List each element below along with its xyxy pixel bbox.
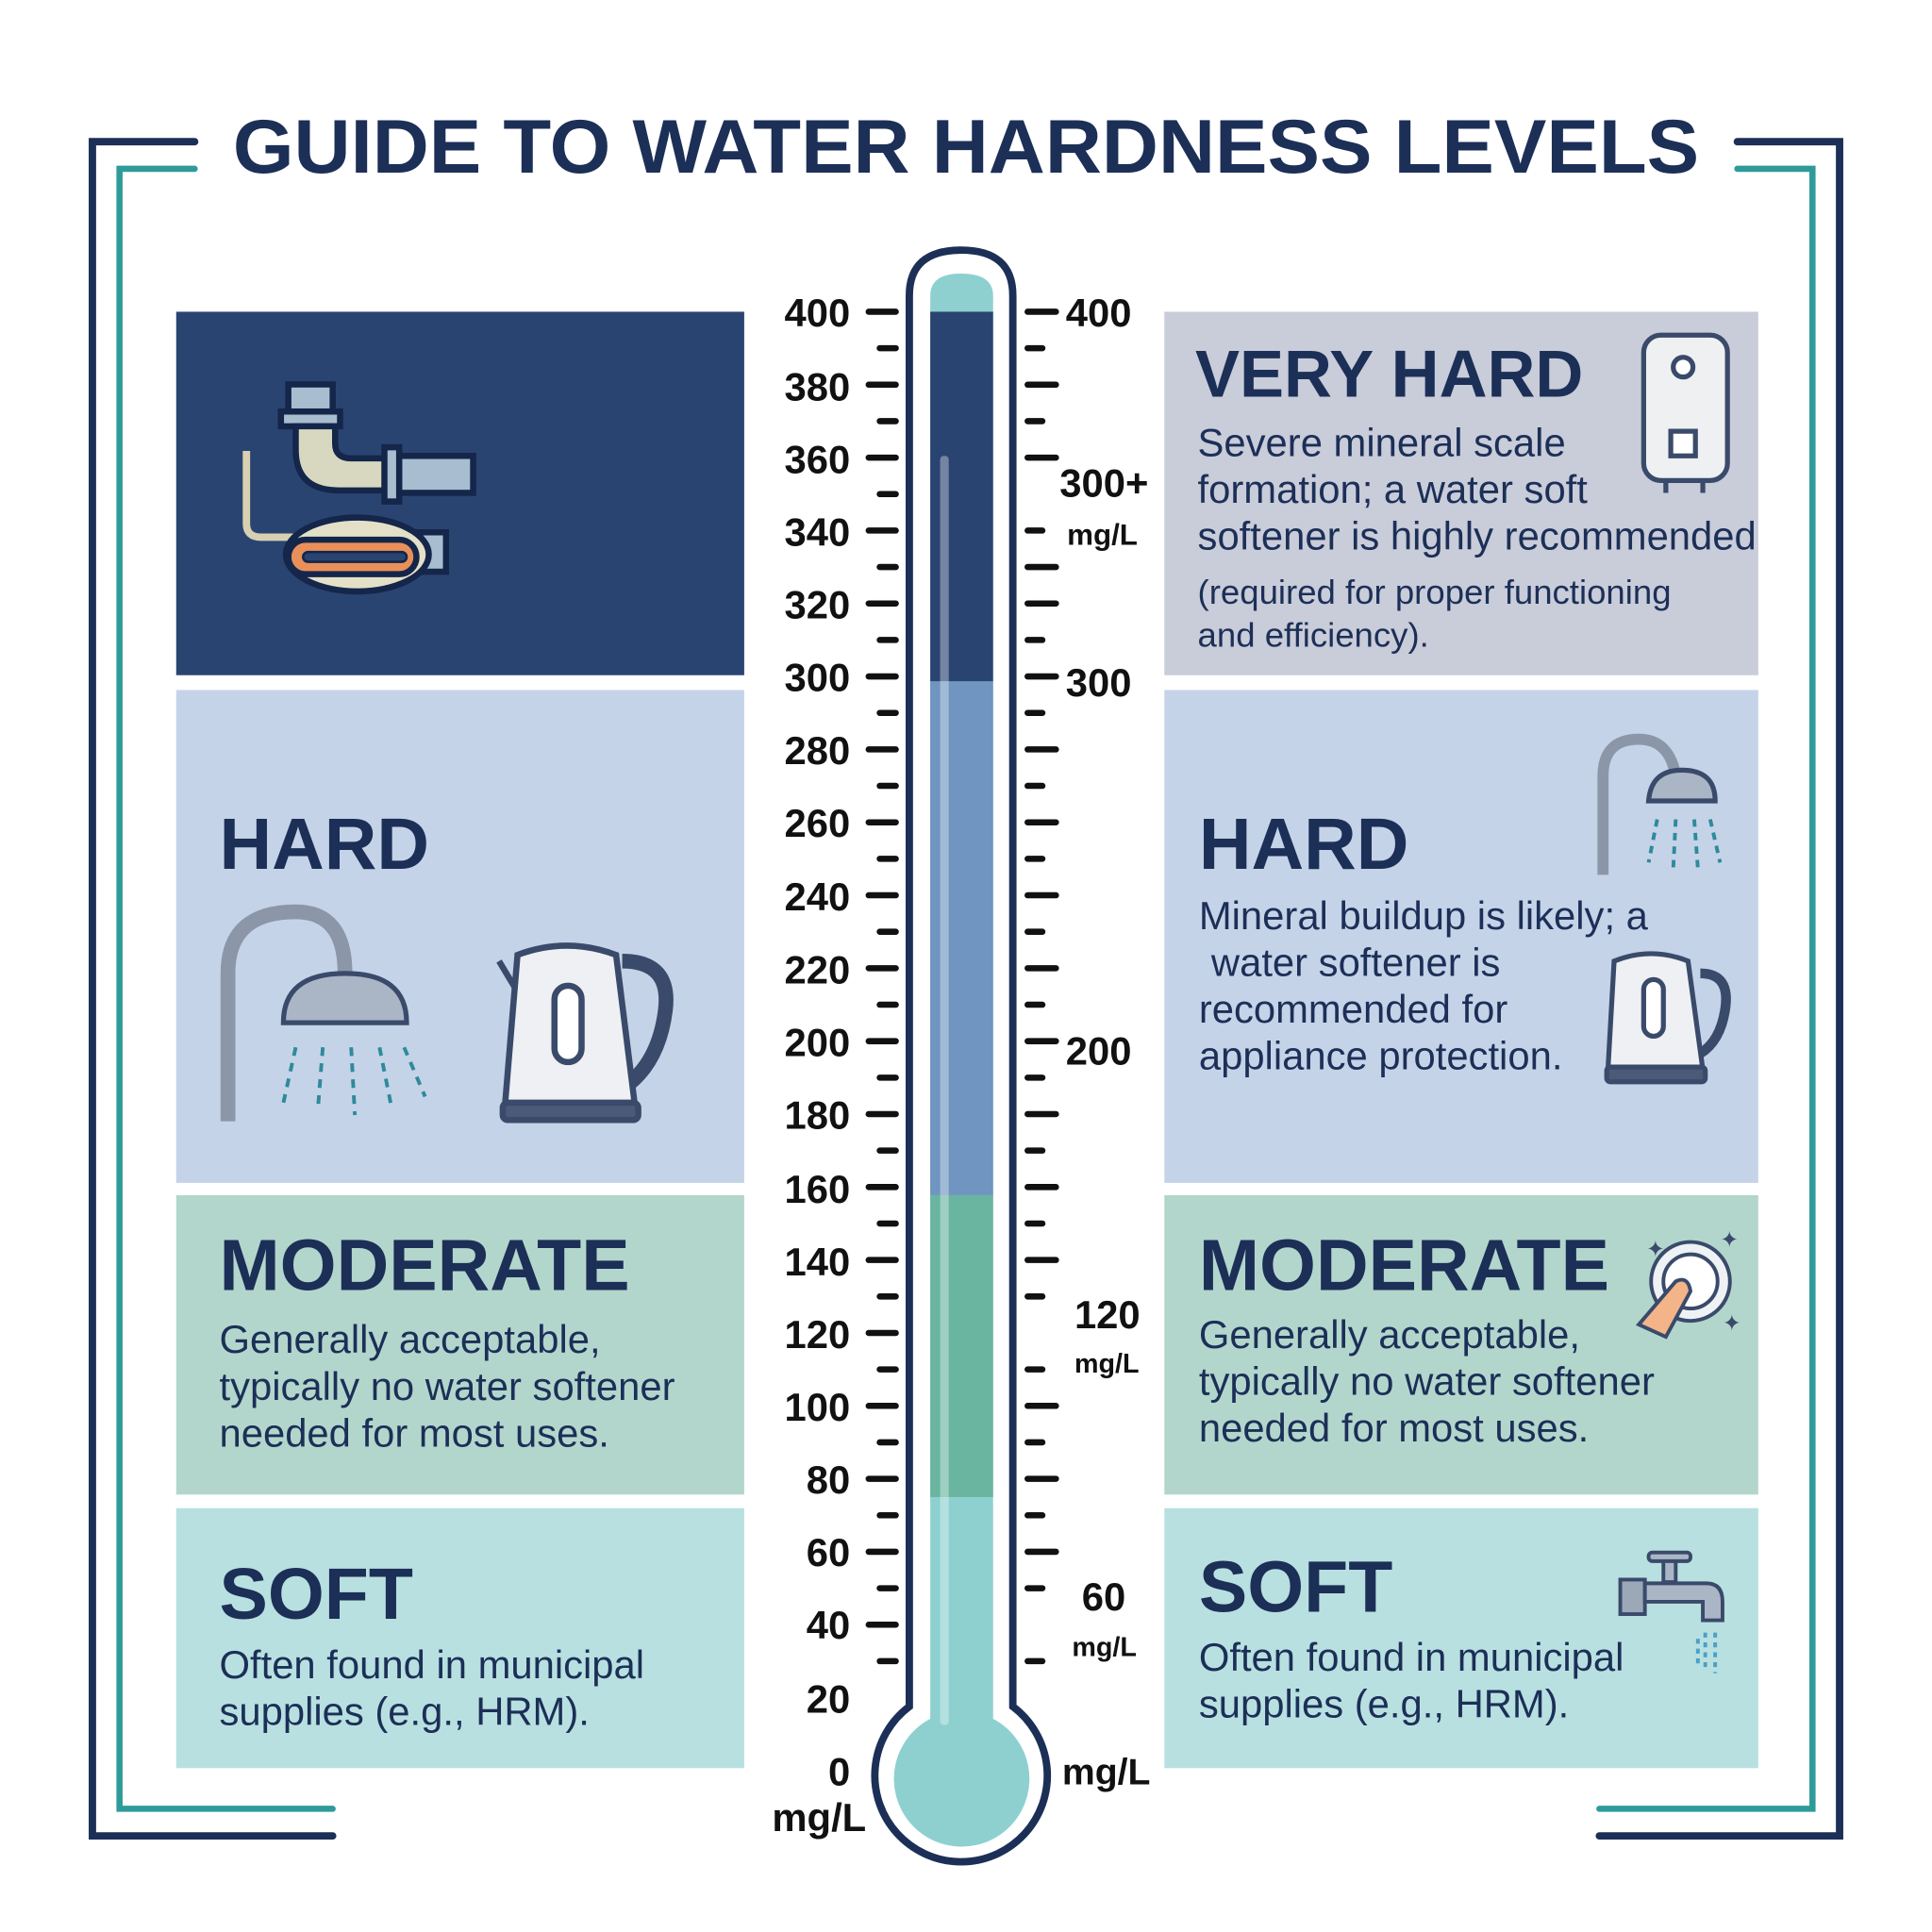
panel: right very hard	[1164, 311, 1758, 675]
right scale labels: 300	[1066, 660, 1132, 705]
heading: moderate right: MODERATE	[1199, 1225, 1609, 1307]
text: very hard description: and efficiency).	[1198, 616, 1429, 655]
left scale labels: 400	[785, 291, 850, 335]
heading: soft: SOFT	[219, 1554, 413, 1635]
panel: left hard	[176, 690, 744, 1183]
right scale labels: 400	[1066, 291, 1132, 335]
text: very hard description: softener is highly recommended	[1198, 514, 1757, 558]
text: soft description right: Often found in municipal	[1199, 1635, 1624, 1679]
left scale labels: 120	[785, 1312, 850, 1357]
text: very hard description: (required for proper functioning	[1198, 573, 1672, 611]
frame	[92, 142, 1840, 1836]
left scale labels: 340	[785, 510, 850, 555]
icon: scaled pipes	[246, 385, 474, 591]
icon: kettle	[499, 945, 666, 1120]
heading: very hard: VERY HARD	[1195, 337, 1583, 411]
heading: moderate: MODERATE	[219, 1225, 630, 1307]
left scale labels: 20	[807, 1677, 850, 1722]
text: hard description: Mineral buildup is likely; a	[1199, 893, 1649, 938]
icon: shower right	[1603, 740, 1720, 874]
right scale labels: mg/L	[1067, 518, 1138, 551]
text: hard description: appliance protection.	[1199, 1034, 1562, 1078]
text: hard description: water softener is	[1210, 940, 1500, 984]
left scale labels: 320	[785, 583, 850, 627]
text: very hard description: formation; a water soft	[1198, 467, 1588, 511]
panel: left soft	[176, 1508, 744, 1768]
icon: hand cleaning plate: ✦	[1646, 1237, 1665, 1261]
left scale labels: 60	[807, 1530, 850, 1574]
left scale ticks	[869, 311, 896, 1661]
left scale labels: mg/L	[772, 1795, 866, 1840]
text: very hard description: Severe mineral scale	[1198, 420, 1566, 464]
left scale labels: 140	[785, 1240, 850, 1284]
text: moderate description right: Generally acceptable,	[1199, 1312, 1580, 1357]
panel: right soft	[1164, 1508, 1758, 1768]
right scale labels: 60	[1082, 1574, 1125, 1619]
icon: hand cleaning plate: ✦	[1720, 1227, 1739, 1252]
panel: right moderate	[1164, 1195, 1758, 1494]
right scale labels: 200	[1066, 1028, 1132, 1073]
heading: soft right: SOFT	[1199, 1546, 1392, 1627]
text: soft description: supplies (e.g., HRM).	[219, 1690, 590, 1734]
right scale ticks	[1027, 311, 1056, 1661]
left scale labels: 200	[785, 1020, 850, 1064]
right scale labels: mg/L	[1062, 1752, 1150, 1792]
left scale labels: 280	[785, 728, 850, 773]
left scale labels: 160	[785, 1167, 850, 1211]
panel: left very hard	[176, 311, 744, 675]
left scale labels: 300	[785, 656, 850, 700]
thermometer	[874, 250, 1047, 1862]
right scale labels: 300+	[1059, 460, 1148, 505]
icon: kettle right	[1607, 954, 1726, 1082]
left scale labels: 100	[785, 1385, 850, 1429]
left scale labels: 380	[785, 364, 850, 408]
left scale labels: 180	[785, 1092, 850, 1137]
left scale labels: 240	[785, 874, 850, 919]
right scale labels: mg/L	[1074, 1349, 1140, 1379]
left scale labels	[772, 291, 866, 1840]
icon: hand cleaning plate: ✦	[1723, 1311, 1741, 1336]
text: moderate description: needed for most uses.	[219, 1410, 609, 1455]
text: soft description: Often found in municipal	[219, 1642, 644, 1687]
panel: right hard	[1164, 690, 1758, 1183]
text: hard description: recommended for	[1199, 987, 1507, 1031]
text: moderate description right: needed for most uses.	[1199, 1406, 1589, 1450]
right scale labels: 120	[1074, 1292, 1141, 1337]
left scale labels: 260	[785, 801, 850, 845]
text: moderate description: typically no water softener	[219, 1364, 675, 1408]
text: moderate description right: typically no water softener	[1199, 1359, 1655, 1404]
icon: water heater	[1643, 335, 1727, 492]
left scale labels: 220	[785, 947, 850, 991]
text: moderate description: Generally acceptable,	[219, 1317, 601, 1361]
left scale labels: 0	[828, 1750, 850, 1794]
left scale labels: 360	[785, 438, 850, 482]
left scale labels: 80	[807, 1457, 850, 1502]
heading: hard: HARD	[219, 804, 429, 885]
right scale labels	[1059, 291, 1150, 1792]
heading: hard right: HARD	[1199, 804, 1408, 885]
panel: left moderate	[176, 1195, 744, 1494]
text: soft description right: supplies (e.g., HRM).	[1199, 1682, 1569, 1726]
icon: faucet	[1621, 1553, 1723, 1674]
left scale labels: 40	[807, 1603, 850, 1647]
title: GUIDE TO WATER HARDNESS LEVELS	[233, 105, 1699, 190]
icon: shower	[228, 912, 425, 1122]
right scale labels: mg/L	[1072, 1632, 1137, 1662]
icon: hand cleaning plate	[1639, 1227, 1741, 1337]
